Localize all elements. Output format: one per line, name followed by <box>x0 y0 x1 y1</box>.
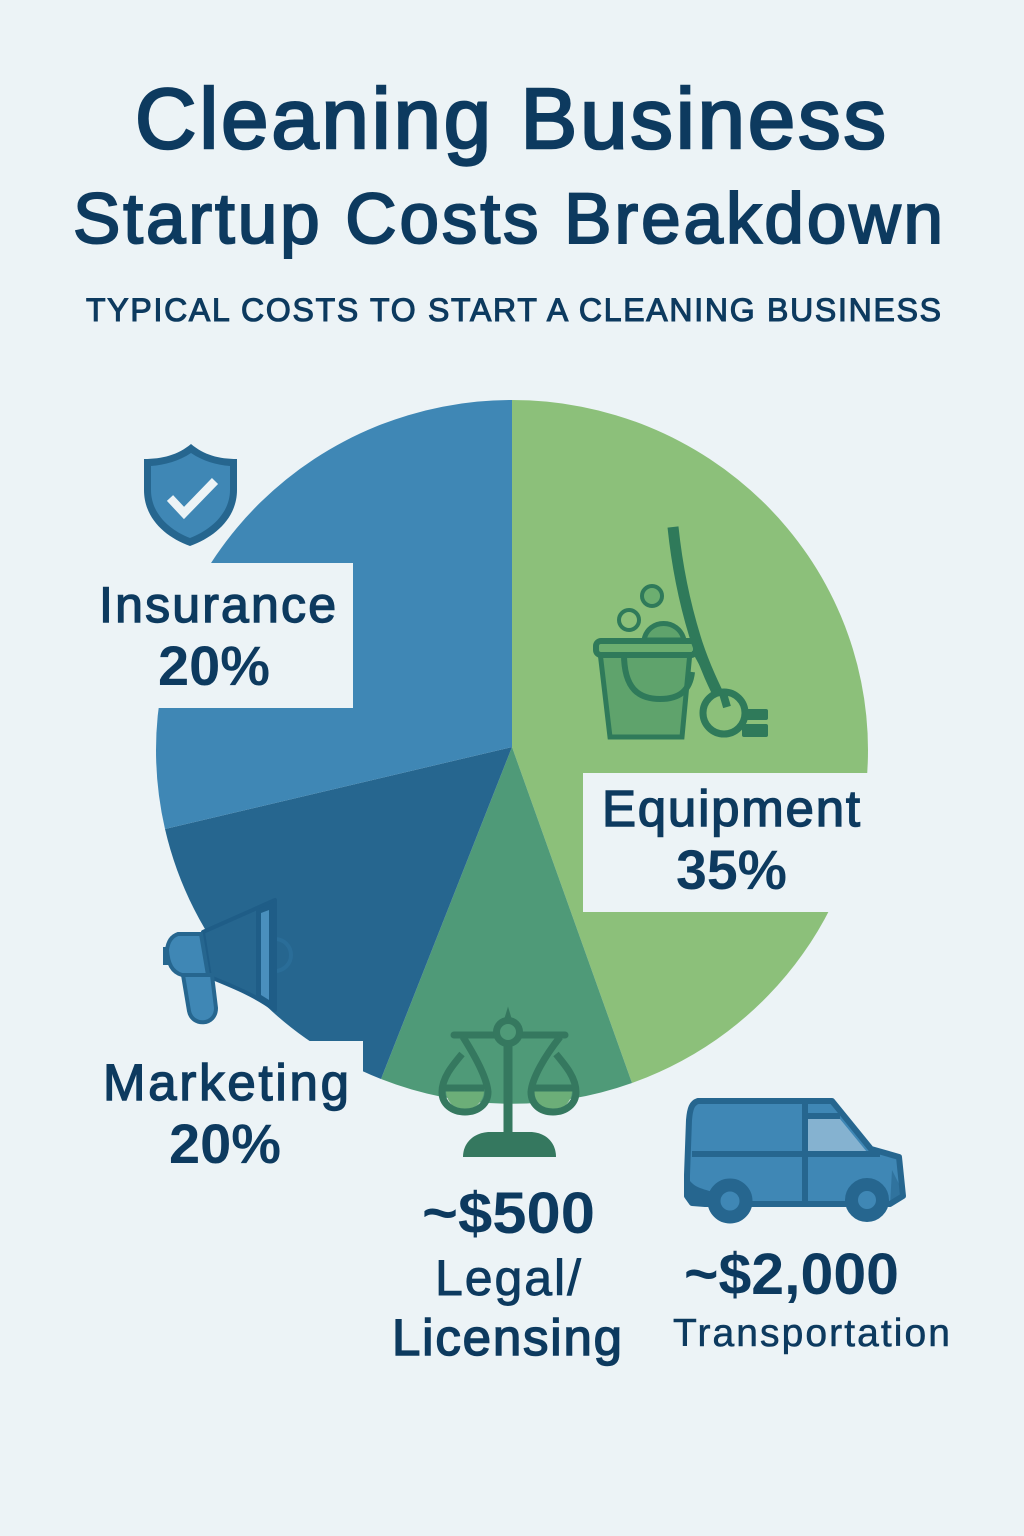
slice: legal <box>381 747 632 1104</box>
subtitle: TYPICAL COSTS TO START A CLEANING BUSINESS <box>86 292 941 328</box>
text: insurance label: 20% <box>158 634 270 697</box>
text: legal licensing label <box>392 1181 622 1366</box>
mop head <box>703 692 745 734</box>
text: equipment label <box>602 780 860 901</box>
wheels <box>714 1185 746 1217</box>
panel: equipment label background <box>583 773 900 912</box>
text: insurance label <box>99 577 336 697</box>
van body <box>687 1101 903 1204</box>
text: transportation label: ~$2,000 <box>684 1242 899 1307</box>
text: legal licensing label: ~$500 <box>422 1181 595 1246</box>
pie chart <box>156 400 868 1104</box>
text: marketing label: Marketing <box>103 1054 349 1111</box>
bucket handle <box>624 654 692 699</box>
icon: scales of justice <box>442 1010 576 1157</box>
icon: shield <box>144 444 237 546</box>
body <box>167 934 208 975</box>
left pan <box>442 1037 488 1112</box>
bubbles <box>642 586 662 606</box>
ring <box>505 1010 511 1020</box>
bucket foam <box>644 624 684 640</box>
text: marketing label: 20% <box>169 1112 281 1175</box>
panel: insurance label background <box>60 563 353 708</box>
title: Startup Costs Breakdown <box>73 180 943 259</box>
panel: marketing label background <box>60 1041 363 1110</box>
text: insurance label: Insurance <box>99 577 336 633</box>
text: transportation label <box>673 1242 950 1355</box>
cone <box>203 900 275 1010</box>
windshield <box>808 1119 867 1152</box>
bucket body <box>600 652 690 737</box>
title <box>73 72 943 259</box>
body lines <box>692 1100 880 1205</box>
right pan <box>531 1037 576 1112</box>
icon: van <box>684 1100 905 1217</box>
text: marketing label <box>103 1054 349 1175</box>
speaker arc <box>275 939 291 971</box>
text: legal licensing label: Legal/ <box>435 1250 581 1306</box>
icon: bucket and mop <box>596 527 768 737</box>
title: Cleaning Business <box>135 72 886 167</box>
text: equipment label: 35% <box>676 838 787 901</box>
slice: equipment <box>512 400 868 1083</box>
text: equipment label: Equipment <box>602 780 860 837</box>
mop handle <box>673 527 724 706</box>
grip <box>183 975 216 1022</box>
icon: megaphone <box>163 900 291 1022</box>
text: legal licensing label: Licensing <box>392 1309 622 1366</box>
lower skirt <box>684 1172 712 1206</box>
cone band <box>256 901 275 1009</box>
text: transportation label: Transportation <box>673 1312 950 1355</box>
pan fills <box>446 1090 484 1110</box>
slice: insurance <box>156 400 512 829</box>
base <box>463 1132 556 1157</box>
beam and post <box>454 1032 565 1038</box>
bucket rim <box>596 641 696 655</box>
slice: marketing <box>165 747 512 1079</box>
